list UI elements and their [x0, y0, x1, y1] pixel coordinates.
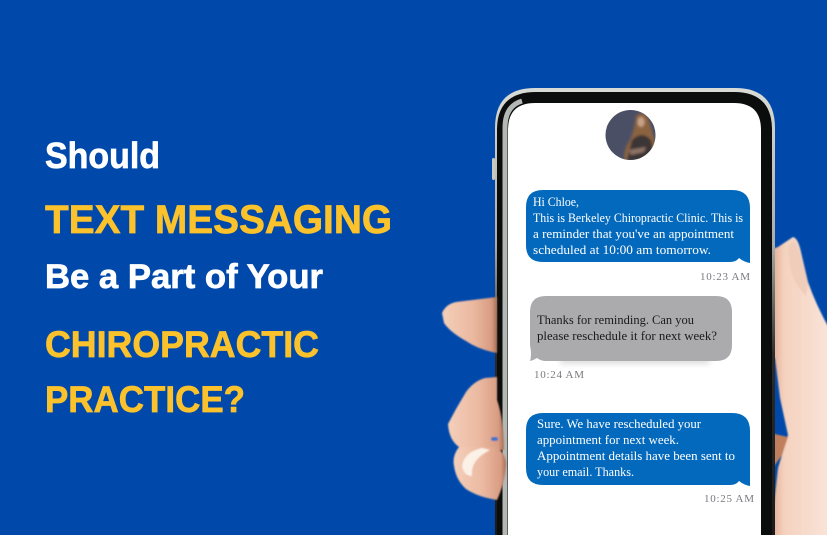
- bubble text: [537, 313, 717, 343]
- thumb: [442, 297, 497, 353]
- phone screen: [508, 103, 761, 535]
- timestamp: 10:23 AM: 10:23 AM: [700, 271, 750, 283]
- message bubble: clinic reminder: [526, 190, 750, 263]
- bubble text: appointment for next week.: [537, 433, 679, 447]
- palm and finger: [770, 237, 827, 535]
- bubble text: a reminder that you've an appointment: [533, 227, 735, 241]
- phone side button: [492, 158, 495, 180]
- knuckle: [448, 377, 504, 451]
- bubble shape: [530, 296, 732, 361]
- fingernail: [788, 242, 808, 296]
- bubble text: Sure. We have rescheduled your: [537, 417, 701, 431]
- heading line: Be a Part of Your: Be a Part of Your: [45, 258, 323, 296]
- heading line: TEXT MESSAGING: TEXT MESSAGING: [45, 198, 392, 242]
- bubble text: Thanks for reminding. Can you: [537, 313, 694, 327]
- phone: [492, 88, 775, 535]
- timestamp: 10:24 AM: 10:24 AM: [534, 369, 584, 381]
- bubble shape: [526, 190, 750, 263]
- phone rim: [495, 88, 775, 535]
- bubble text: This is Berkeley Chiropractic Clinic. This is: [533, 211, 743, 225]
- message bubble: patient reply: [530, 296, 732, 361]
- heading line: PRACTICE?: PRACTICE?: [45, 379, 245, 420]
- phone inner bezel: [505, 101, 522, 535]
- bubble shadow: [560, 357, 710, 364]
- blue highlight on finger: [491, 437, 498, 441]
- lower finger: [454, 447, 506, 500]
- message bubble: clinic confirmation: [526, 413, 750, 486]
- icon: fingers holding phone, left side: [442, 297, 506, 500]
- bubble text: [537, 417, 735, 479]
- shaded finger behind phone: [770, 433, 788, 472]
- bubble text: Hi Chloe,: [533, 195, 579, 209]
- bubble text: scheduled at 10:00 am tomorrow.: [533, 243, 711, 257]
- phone black frame: [497, 92, 772, 535]
- bubble text: your email. Thanks.: [537, 465, 634, 479]
- bubble text: please reschedule it for next week?: [537, 329, 717, 343]
- bubble shape: [526, 413, 750, 486]
- icon: contact avatar: [605, 110, 656, 160]
- fingernail: [462, 448, 490, 476]
- bubble text: Appointment details have been sent to: [537, 449, 735, 463]
- timestamp: 10:25 AM: 10:25 AM: [704, 493, 754, 505]
- heading line: Should: Should: [45, 135, 160, 176]
- icon: hand holding phone, right side: [770, 237, 827, 535]
- bubble text: [533, 195, 743, 257]
- heading line: CHIROPRACTIC: CHIROPRACTIC: [45, 324, 319, 365]
- title: [45, 135, 392, 420]
